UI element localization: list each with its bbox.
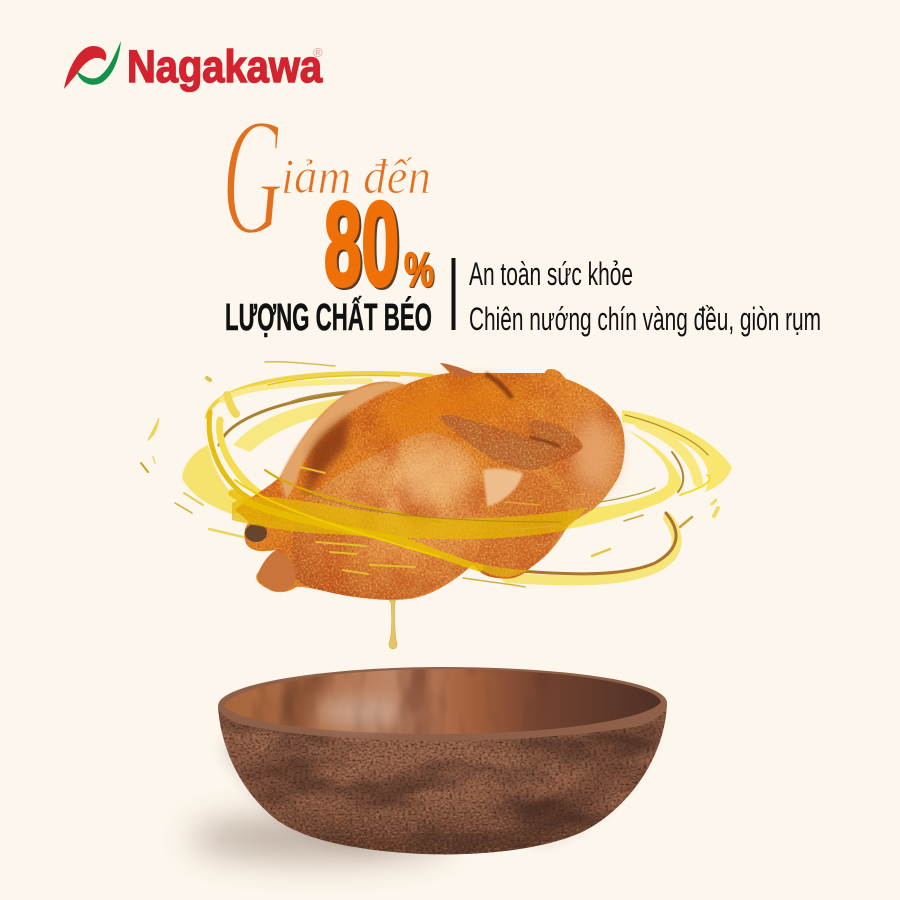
bowl	[218, 667, 667, 854]
bowl shadow	[190, 816, 450, 860]
bowl rim	[218, 667, 667, 741]
logo wordmark: Nagakawa	[127, 41, 323, 92]
thigh highlight	[399, 445, 471, 505]
oil drip	[389, 600, 397, 649]
benefit: health: An toàn sức khỏe	[469, 256, 633, 292]
wing crease	[530, 437, 560, 447]
translucent band over chicken	[232, 496, 587, 539]
percent sign: %	[404, 244, 434, 297]
chicken streaks	[300, 467, 415, 574]
number 80: 80	[324, 178, 399, 311]
leg tip	[245, 524, 267, 542]
top arcs	[207, 373, 432, 417]
subheading: lượng chất béo: LƯỢNG CHẤT BÉO	[225, 295, 432, 339]
icon: logo swoosh	[64, 41, 121, 89]
script capital G: G	[222, 82, 283, 270]
bowl dark grain left	[226, 740, 390, 850]
scorch marks	[485, 374, 512, 398]
heading: Giảm đến	[222, 82, 431, 270]
right side pale shading	[572, 414, 616, 490]
dark patch under wing	[305, 413, 353, 497]
number shadow: 80	[326, 180, 401, 313]
tail	[257, 550, 296, 591]
thigh	[292, 433, 484, 599]
script letters: iảm đến	[281, 148, 431, 204]
neck stub	[440, 363, 474, 378]
small droplets	[148, 418, 159, 440]
saturated back	[386, 383, 530, 440]
left loop	[209, 412, 330, 530]
right bands	[622, 410, 732, 492]
chicken body	[235, 363, 625, 600]
oil swirl: back layer	[141, 362, 732, 587]
figure: 80%	[324, 178, 435, 313]
registered mark: ®	[313, 45, 323, 60]
wing	[438, 415, 583, 470]
bright oil streaks	[232, 493, 480, 568]
leg foot yellow	[474, 562, 530, 577]
lower right arc	[507, 518, 677, 580]
bowl dark grain right	[535, 730, 650, 840]
oil swirl: front layer	[232, 467, 587, 577]
bowl inner highlight	[316, 697, 400, 727]
bowl outer body	[218, 703, 667, 854]
pale left wing	[280, 382, 405, 500]
text: benefits	[469, 256, 821, 337]
lower leg	[474, 471, 569, 579]
percent shadow: %	[405, 245, 435, 298]
chicken	[235, 363, 625, 600]
bowl inner	[224, 669, 661, 734]
divider bar	[452, 258, 456, 330]
pale chest patch	[483, 468, 523, 507]
logo: Nagakawa	[64, 41, 323, 92]
left fill band	[182, 445, 250, 514]
